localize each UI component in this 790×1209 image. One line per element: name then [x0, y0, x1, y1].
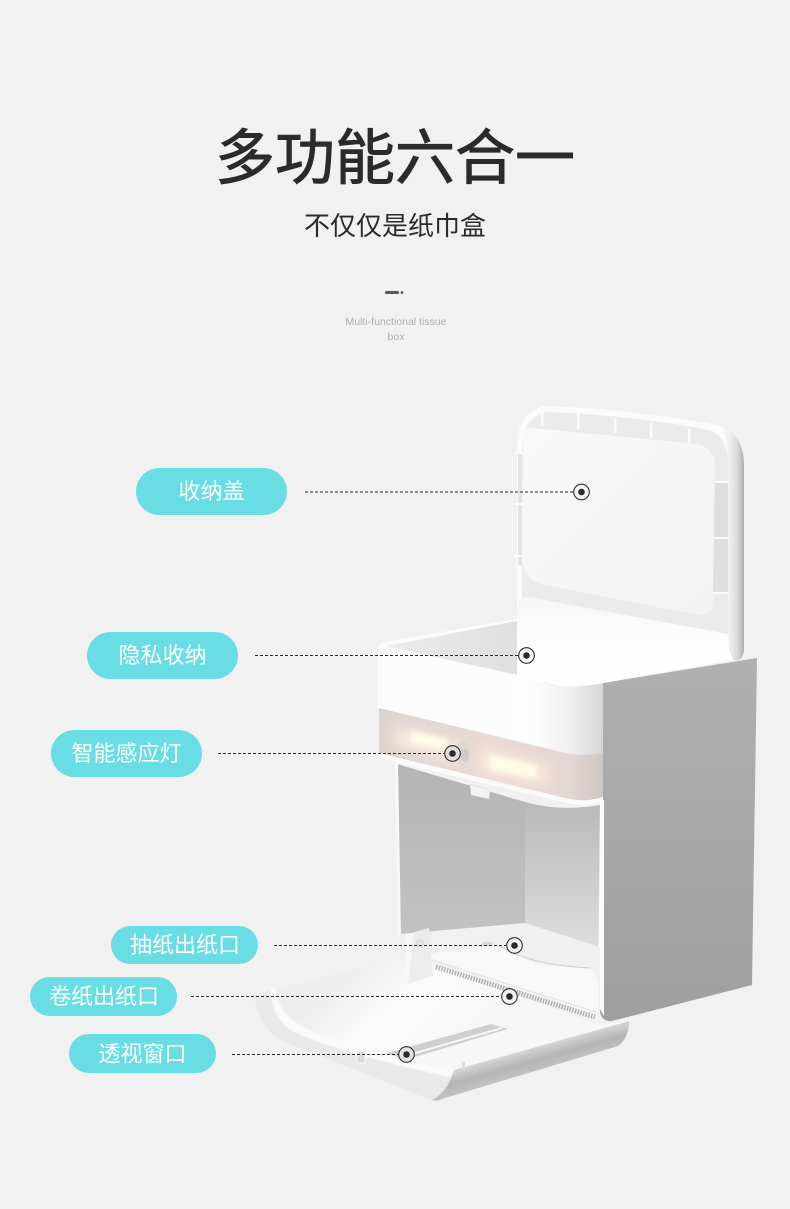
product illustration: tissue box: [254, 406, 757, 1101]
label: 卷纸出纸口: [30, 977, 517, 1016]
subtitle: 不仅仅是纸巾盒: [304, 211, 486, 241]
english caption: box: [388, 331, 405, 343]
label: 抽纸出纸口: 抽纸出纸口: [130, 932, 240, 958]
latch: [470, 784, 490, 799]
label: 隐私收纳: 隐私收纳: [118, 643, 207, 668]
label: 抽纸出纸口: [111, 926, 522, 964]
lid: [514, 406, 744, 660]
label: 透视窗口: [69, 1034, 414, 1073]
label: 智能感应灯: 智能感应灯: [71, 741, 182, 766]
label: 收纳盖: 收纳盖: [178, 479, 245, 504]
paper cutter teeth: [436, 967, 595, 1017]
title: 多功能六合一: [215, 125, 575, 192]
raised lid panel: [522, 428, 715, 615]
label: 收纳盖: [136, 468, 589, 515]
front flap: [254, 958, 629, 1101]
english caption: Multi-functional tissue: [346, 316, 447, 328]
cavity walls: [395, 762, 604, 1016]
label: 透视窗口: 透视窗口: [98, 1042, 187, 1066]
see-through window: [387, 1024, 508, 1060]
inner back wall of storage: [517, 597, 733, 686]
paper outlet floor: [423, 923, 600, 1020]
decorative dash mark: [385, 291, 403, 294]
storage drawer front: [378, 619, 603, 755]
inner left wall of storage: [385, 620, 517, 675]
hinge: [405, 928, 433, 984]
label: 智能感应灯: [51, 730, 460, 777]
sensor light band: [379, 708, 603, 805]
label: 隐私收纳: [87, 632, 534, 679]
main body side: [600, 658, 757, 1021]
label: 卷纸出纸口: 卷纸出纸口: [49, 984, 159, 1009]
